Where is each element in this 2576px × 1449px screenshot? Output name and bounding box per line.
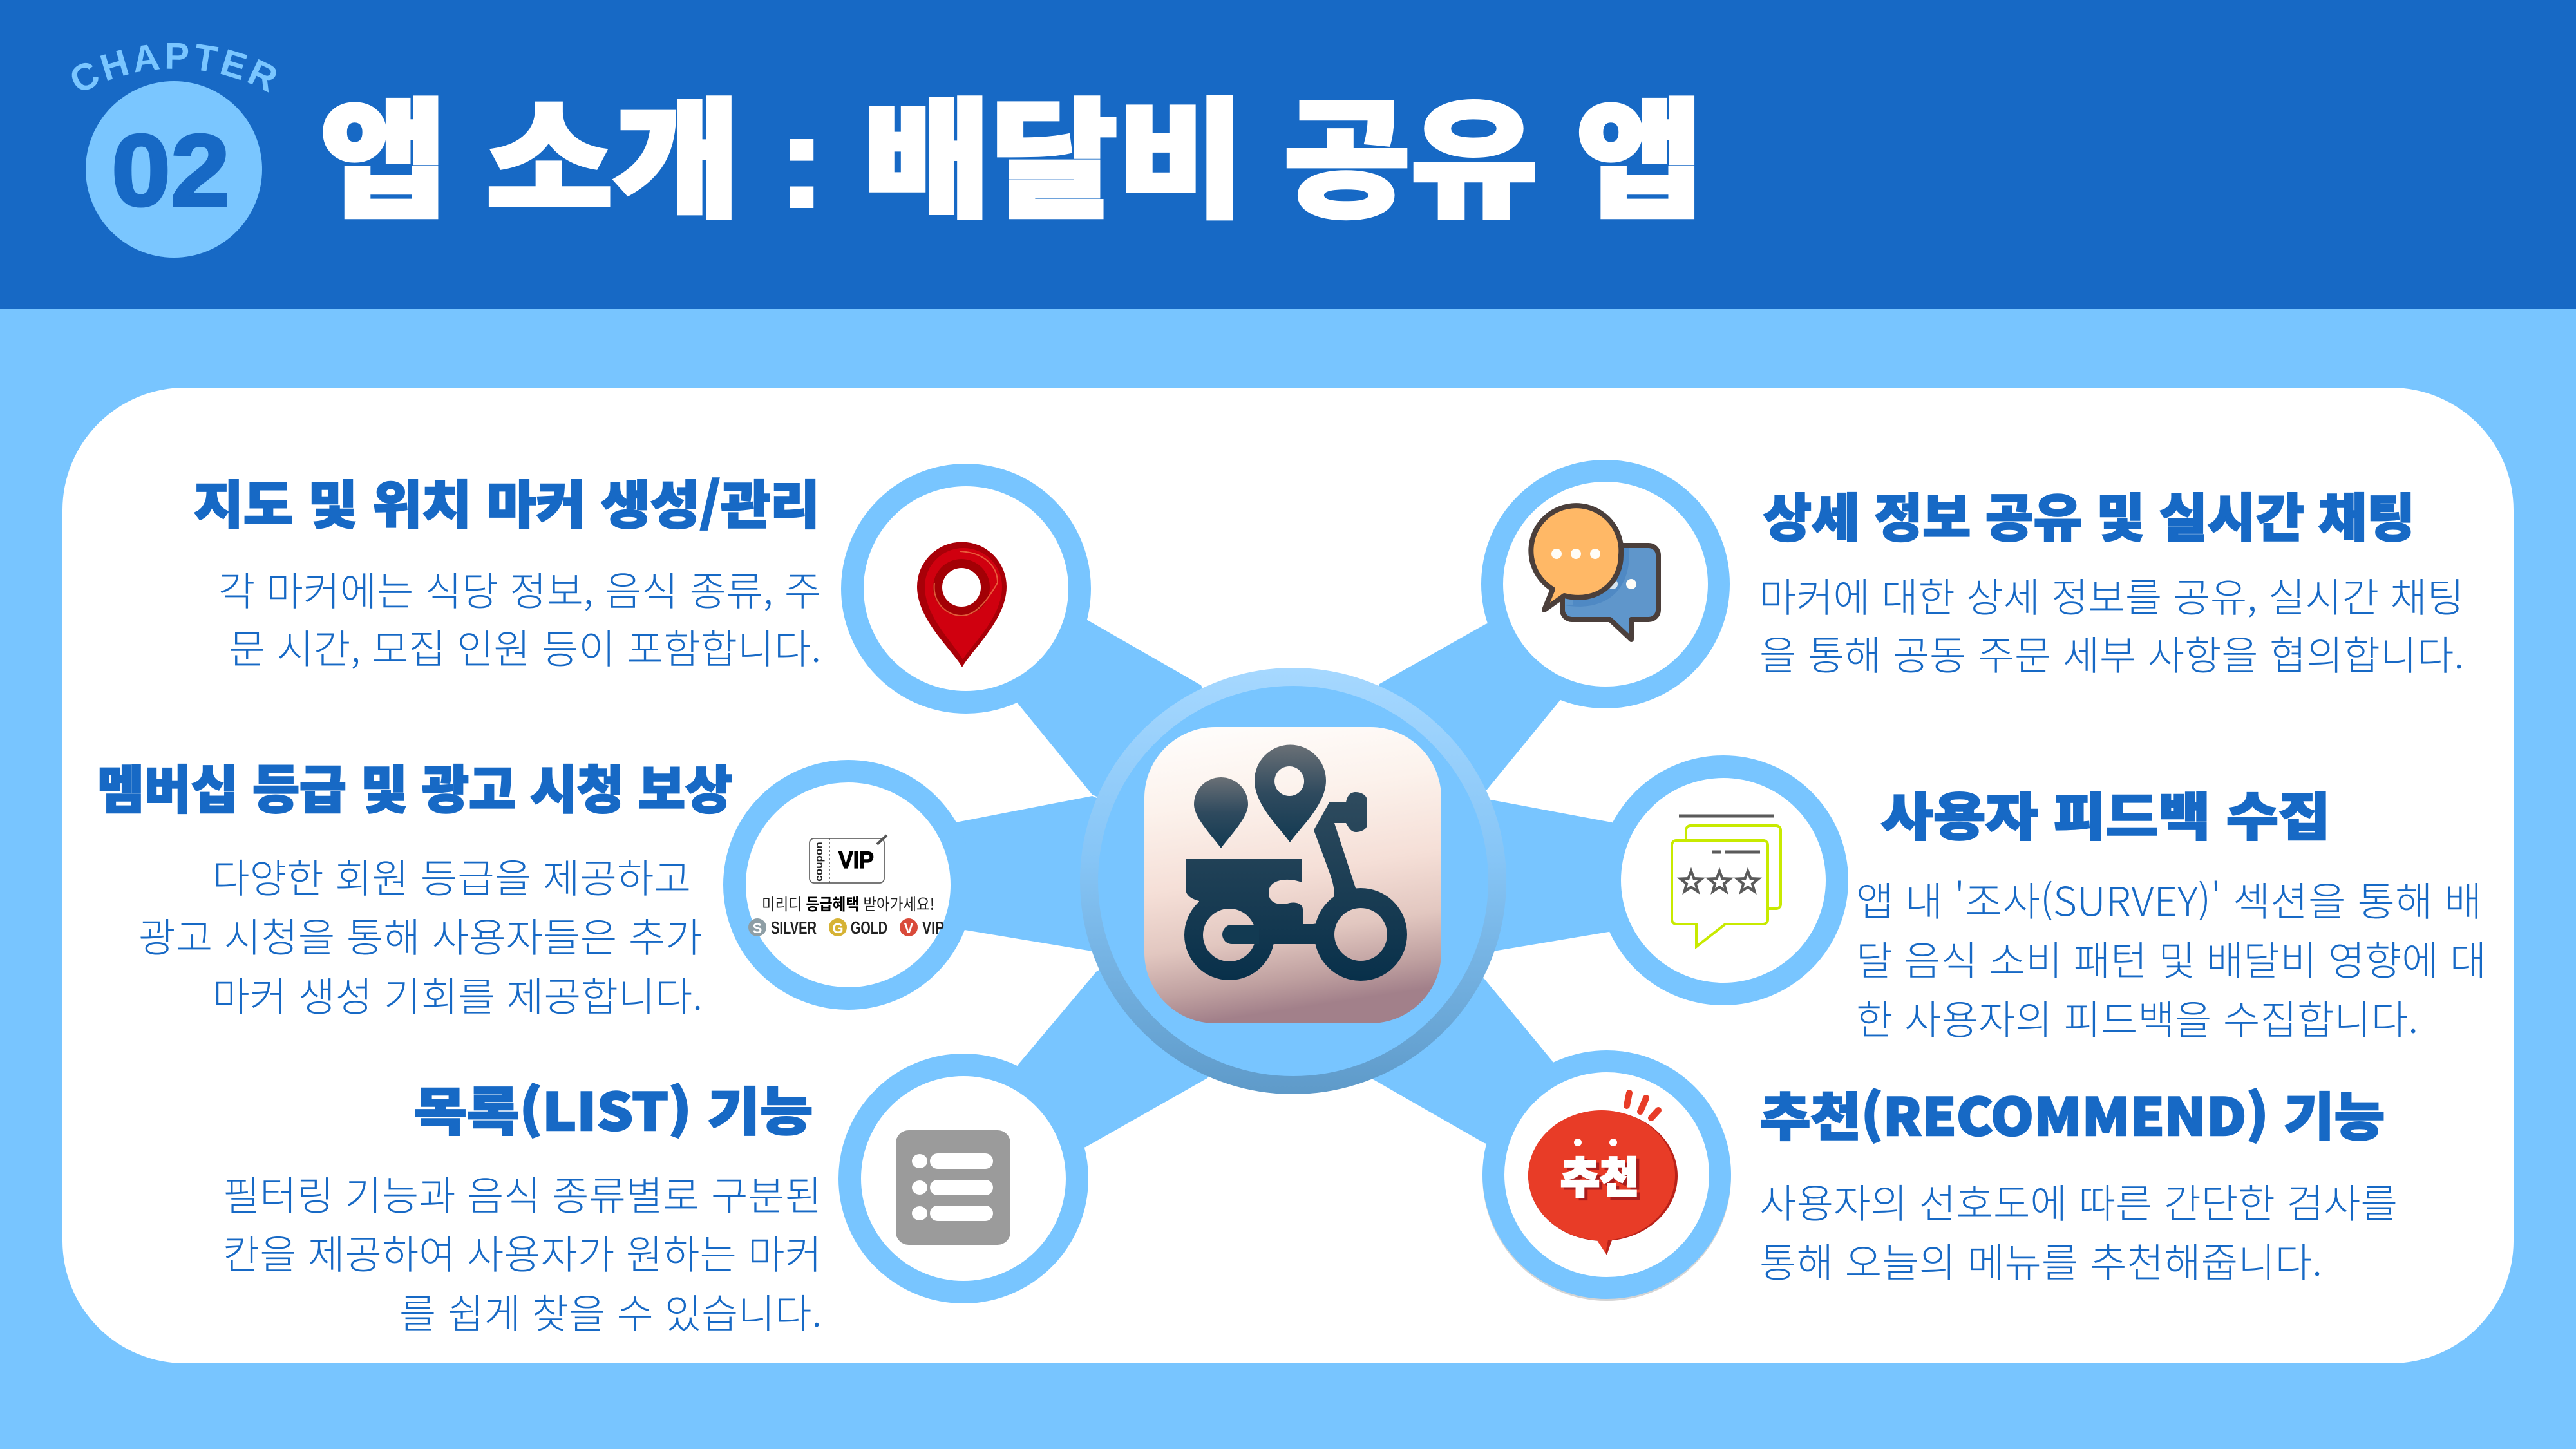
chapter badge: CHAPTER bbox=[72, 43, 276, 93]
body: 광고 시청을 통해 사용자들은 추가 bbox=[138, 905, 703, 963]
chapter badge bbox=[72, 43, 276, 258]
heading: 사용자 피드백 수집 bbox=[1881, 776, 2331, 851]
body: 각 마커에는 식당 정보, 음식 종류, 주 bbox=[218, 559, 821, 617]
node: map marker bbox=[853, 475, 1079, 702]
icon: chat bubbles bbox=[1531, 506, 1658, 639]
text: chat bbox=[1759, 477, 2464, 681]
icon: VIP coupon: GOLD bbox=[851, 918, 887, 938]
node: list bbox=[850, 1065, 1077, 1292]
heading: 상세 정보 공유 및 실시간 채팅 bbox=[1763, 477, 2415, 552]
body: 다양한 회원 등급을 제공하고 bbox=[213, 846, 691, 904]
node: feedback bbox=[1610, 766, 1837, 994]
body: 를 쉽게 찾을 수 있습니다. bbox=[399, 1282, 822, 1340]
node: chat bbox=[1492, 471, 1719, 697]
heading: 추천(RECOMMEND) 기능 bbox=[1760, 1076, 2385, 1151]
icon: VIP coupon: 미리디 등급혜택 받아가세요! bbox=[762, 892, 934, 915]
center app icon: scooter with pins bbox=[1144, 727, 1441, 1023]
icon: recommend bubble bbox=[1528, 1093, 1678, 1255]
body: 필터링 기능과 음식 종류별로 구분된 bbox=[223, 1164, 822, 1222]
body bbox=[138, 846, 703, 1023]
text: recommend bbox=[1759, 1076, 2398, 1289]
body: 칸을 제공하여 사용자가 원하는 마커 bbox=[223, 1222, 822, 1280]
body: 문 시간, 모집 인원 등이 포함합니다. bbox=[229, 617, 821, 675]
icon: VIP coupon: SILVER bbox=[771, 918, 817, 938]
icon: VIP coupon: VIP bbox=[838, 847, 874, 873]
icon: recommend bubble: 추천 bbox=[1560, 1144, 1639, 1206]
heading: 멤버십 등급 및 광고 시청 보상 bbox=[97, 749, 732, 824]
node: recommend bbox=[1482, 1052, 1731, 1301]
text: membership bbox=[97, 749, 732, 1023]
large pin bbox=[1255, 745, 1326, 842]
body: 앱 내 '조사(SURVEY)' 섹션을 통해 배 bbox=[1856, 869, 2482, 927]
body: 을 통해 공동 주문 세부 사항을 협의합니다. bbox=[1759, 623, 2464, 681]
title: 앱 소개 : 배달비 공유 앱 bbox=[320, 57, 1703, 243]
icon: VIP coupon: V bbox=[904, 920, 914, 936]
heading: 지도 및 위치 마커 생성/관리 bbox=[194, 464, 820, 539]
scooter bbox=[1184, 792, 1407, 981]
icon: feedback stars bbox=[1672, 816, 1781, 947]
icon: VIP coupon: G bbox=[832, 920, 844, 936]
icon: VIP coupon bbox=[748, 835, 944, 938]
icon: red location pin bbox=[917, 542, 1007, 667]
main white panel bbox=[62, 388, 2514, 1363]
body bbox=[1759, 1171, 2398, 1289]
heading: 목록(LIST) 기능 bbox=[414, 1071, 813, 1146]
icon: VIP coupon: coupon bbox=[813, 842, 825, 882]
body bbox=[1856, 869, 2486, 1046]
icon: list bbox=[896, 1130, 1010, 1245]
header banner bbox=[0, 0, 2576, 309]
icon: VIP coupon: VIP bbox=[922, 918, 944, 938]
icon: VIP coupon: S bbox=[753, 920, 762, 936]
icon: recommend bubble: 추천 bbox=[1564, 1146, 1642, 1208]
body: 통해 오늘의 메뉴를 추천해줍니다. bbox=[1759, 1231, 2322, 1289]
node: membership bbox=[734, 772, 962, 998]
body: 한 사용자의 피드백을 수집합니다. bbox=[1856, 988, 2418, 1046]
text: map markers bbox=[194, 464, 821, 675]
small pin bbox=[1194, 777, 1248, 848]
text: list bbox=[223, 1071, 822, 1340]
body bbox=[1759, 565, 2464, 681]
body bbox=[223, 1164, 822, 1340]
chapter badge: 02 bbox=[111, 114, 230, 227]
body: 사용자의 선호도에 따른 간단한 검사를 bbox=[1759, 1171, 2398, 1229]
body: 마커에 대한 상세 정보를 공유, 실시간 채팅 bbox=[1759, 565, 2464, 623]
body bbox=[218, 559, 821, 675]
connector hub bbox=[848, 584, 1723, 1179]
body: 달 음식 소비 패턴 및 배달비 영향에 대 bbox=[1856, 929, 2486, 987]
body: 마커 생성 기회를 제공합니다. bbox=[213, 965, 703, 1023]
text: feedback bbox=[1856, 776, 2486, 1046]
center hub ring bbox=[1089, 677, 1497, 1085]
